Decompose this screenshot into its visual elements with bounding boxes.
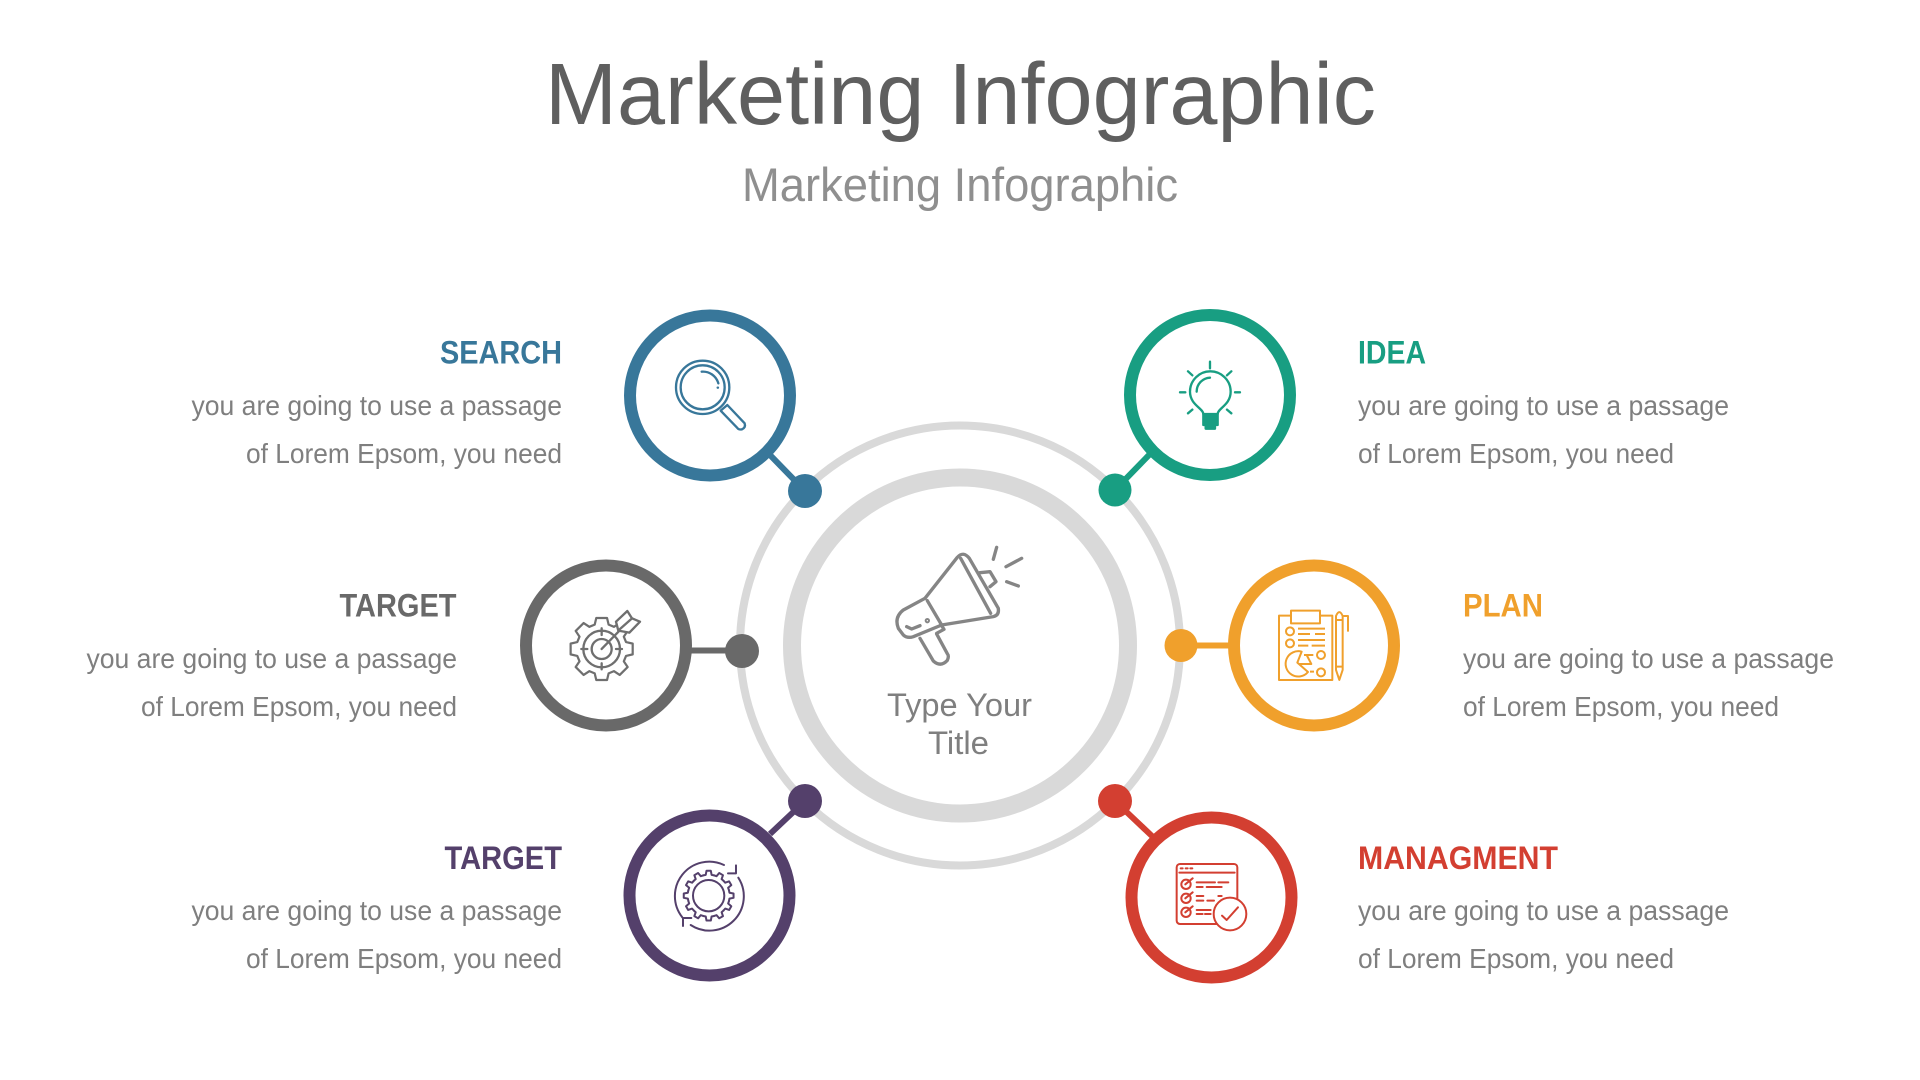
text: search [192,334,562,469]
node: target cycle [630,784,822,976]
node: management [1098,784,1292,978]
icon: magnifying glass [676,361,745,429]
text: idea: of Lorem Epsom, you need [1358,438,1674,469]
text: plan: you are going to use a passage [1463,643,1834,674]
text: idea [1358,334,1729,469]
title: Marketing Infographic [545,46,1376,143]
text: management: of Lorem Epsom, you need [1358,943,1674,974]
subtitle: Marketing Infographic [742,158,1178,211]
center label: Title [928,725,989,761]
node: search [630,316,822,508]
text: search: of Lorem Epsom, you need [246,438,562,469]
icon: checklist [1177,864,1246,930]
text: target: you are going to use a passage [86,643,457,674]
text: target cycle: you are going to use a passage [192,895,562,926]
icon: clipboard with pen [1279,611,1348,680]
text: management: MANAGMENT [1358,840,1558,876]
text: management [1358,840,1729,974]
icon: megaphone [897,547,1022,664]
central hub rings [740,426,1180,866]
text: idea: you are going to use a passage [1358,390,1729,421]
node: idea [1098,315,1290,506]
node: target gear [526,566,759,726]
icon: gear with arrow [571,611,640,680]
text: target [86,588,457,722]
text: management: you are going to use a passage [1358,895,1729,926]
text: target cycle [192,840,562,974]
text: target: TARGET [340,588,457,624]
text: target cycle: TARGET [444,840,562,876]
text: target: of Lorem Epsom, you need [141,691,457,722]
text: idea: IDEA [1358,334,1426,370]
icon: light bulb [1180,362,1240,429]
text: plan: PLAN [1463,588,1543,624]
center label: Type Your [887,687,1032,723]
text: plan: of Lorem Epsom, you need [1463,691,1779,722]
text: search: you are going to use a passage [192,390,562,421]
text: target cycle: of Lorem Epsom, you need [246,943,562,974]
text: plan [1463,588,1834,722]
text: search: SEARCH [440,334,562,370]
center label [887,687,1032,761]
node: plan [1164,566,1394,726]
icon: rotating gear [675,862,744,931]
